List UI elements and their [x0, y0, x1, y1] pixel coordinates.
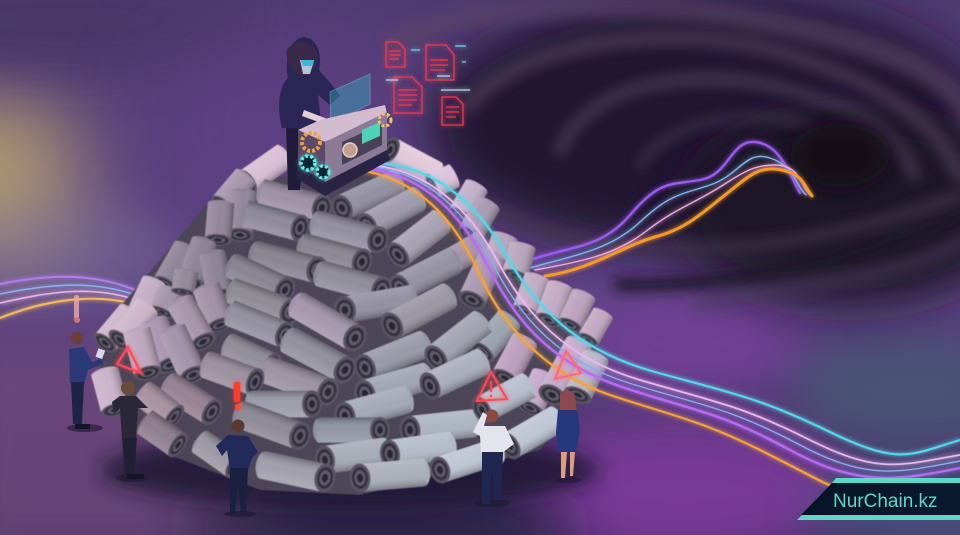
exclamation mark at left [74, 295, 80, 323]
dark swirl vortex [395, 0, 960, 305]
logo text: NurChain.kz [833, 491, 938, 512]
mound of paper scrolls [90, 134, 615, 495]
hacker figure [279, 37, 340, 190]
floor shadow under mound [100, 432, 600, 508]
data stream across mound to lower right [360, 163, 960, 487]
person: man from behind in centre [216, 420, 258, 517]
warning: left triangle [117, 347, 141, 373]
logo badge [797, 478, 960, 520]
upper-right data stream [525, 142, 812, 276]
machine [296, 105, 391, 196]
holographic screen [330, 74, 370, 124]
warning: centre triangle [477, 372, 507, 401]
warning: right triangle [555, 351, 581, 379]
person: man from behind at left [112, 381, 148, 482]
hacker at machine [279, 37, 470, 196]
floating documents [386, 42, 470, 125]
person: man with tablet [67, 332, 105, 432]
left data stream [0, 277, 140, 318]
person: man in white shirt [473, 410, 514, 507]
exclamation mark over mound [234, 382, 241, 410]
person: woman in blue dress [554, 390, 582, 483]
